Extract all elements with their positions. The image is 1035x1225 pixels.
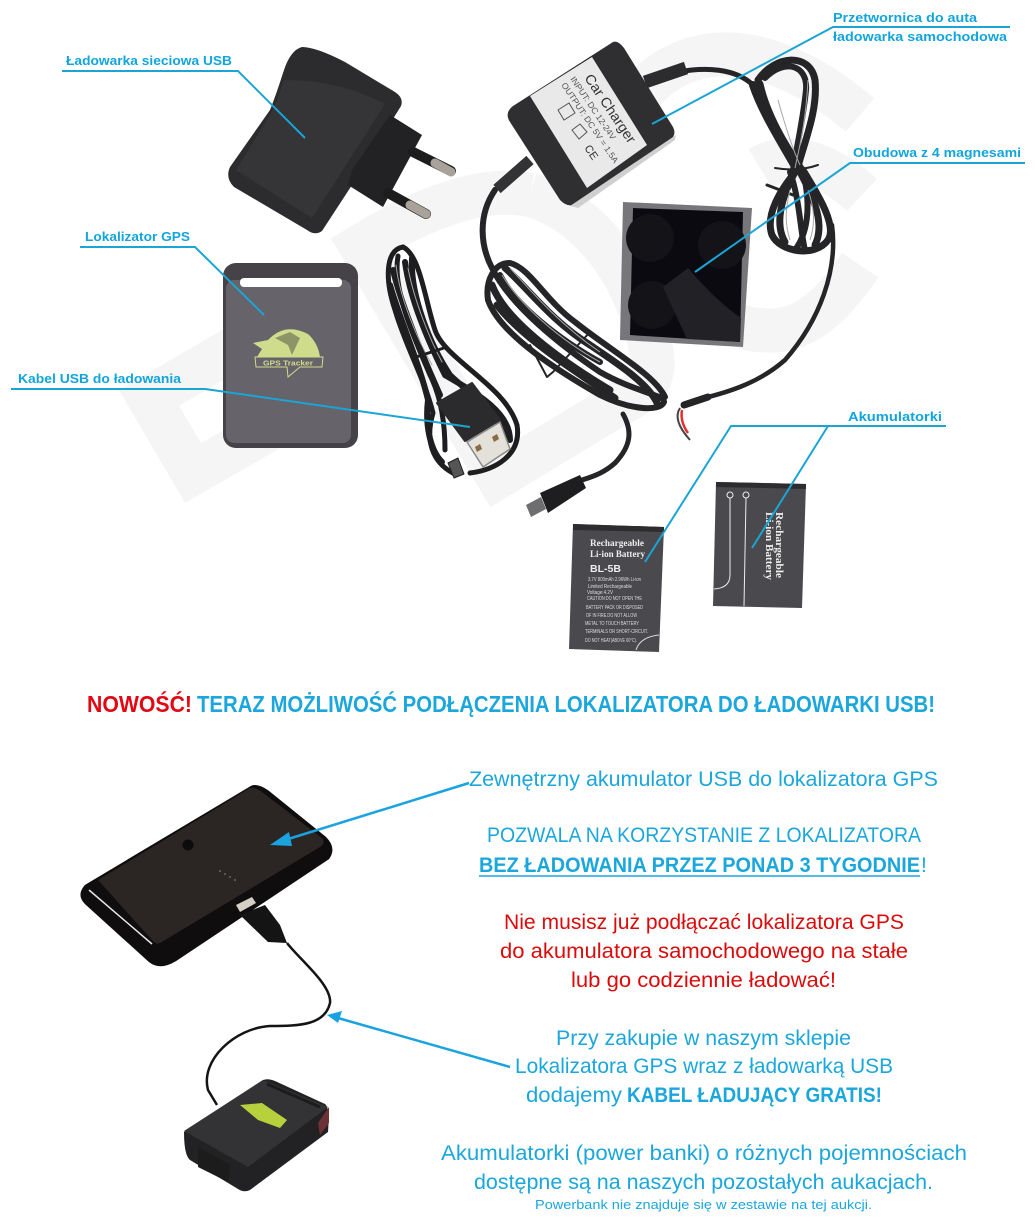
text: free charging cable: KABEL ŁADUJĄCY GRATIS! (627, 1084, 882, 1107)
product: battery BL-5B: BL-5B (590, 564, 621, 575)
callout: USB charging cable (11, 371, 470, 427)
product: power bank (82, 787, 331, 965)
callout: car charger (652, 10, 1010, 124)
callout: magnet case (695, 145, 1025, 272)
callout: GPS locator: Lokalizator GPS (85, 229, 190, 244)
product: battery BL-5B: METAL TO TOUCH BATTERY (585, 621, 640, 627)
product: battery BL-5B: DO NOT HEAT(ABOVE 60°C). (585, 638, 637, 644)
text: three weeks without charging: BEZ ŁADOWANIA PRZEZ PONAD 3 TYGODNIE (479, 854, 920, 877)
product: USB wall charger (228, 47, 451, 233)
product: battery BL-5B: 3.7V 800mAh 2.96Wh Li-ion (588, 577, 641, 583)
product: battery back (713, 482, 806, 608)
product: car charger with cable (483, 42, 833, 517)
product: magnet case (620, 202, 752, 347)
watermark: DDS logo (149, 54, 862, 477)
product: battery back: Li-ion Battery (763, 512, 774, 581)
product: battery BL-5B: TERMINALS OR SHORT-CIRCUIT. (585, 629, 648, 635)
product: car charger with cable: INPUT: DC 12-24V (568, 75, 618, 142)
product: GPS tracker (223, 263, 358, 448)
product: battery BL-5B: CAUTION:DO NOT OPEN THE (587, 596, 643, 602)
arrow: to cable (327, 1011, 510, 1067)
text: external battery: Zewnętrzny akumulator USB do lokalizatora GPS (469, 768, 938, 791)
text: power banks available: Powerbank nie znajduje się w zestawie na tej aukcji. (535, 1197, 872, 1212)
callout: batteries: Akumulatorki (848, 409, 942, 424)
callout: magnet case: Obudowa z 4 magnesami (853, 145, 1021, 160)
text: power banks available: dostępne są na naszych pozostałych aukacjach. (474, 1171, 933, 1194)
callout: USB wall charger (62, 53, 305, 138)
product: battery BL-5B: OF IN FIRE.DO NOT ALLOW (586, 613, 637, 619)
callout: batteries (645, 409, 946, 562)
text: free charging cable: Przy zakupie w naszym sklepie (556, 1027, 851, 1050)
headline: TERAZ MOŻLIWOŚĆ PODŁĄCZENIA LOKALIZATORA DO ŁADOWARKI USB! (197, 690, 935, 717)
product: car charger with cable: OUTPUT: DC 5V = 1.5A (559, 81, 621, 165)
callout: car charger: Przetwornica do auta (833, 10, 978, 25)
callout: USB charging cable: Kabel USB do ładowania (18, 371, 182, 386)
text: three weeks without charging (479, 824, 927, 877)
text: red notice (500, 911, 908, 992)
product: battery BL-5B: Limited Rechargeable (588, 584, 632, 590)
text: free charging cable: dodajemy (526, 1084, 623, 1107)
product: battery BL-5B: Voltage:4.2V (587, 590, 614, 596)
product: battery back: Rechargeable (773, 512, 784, 578)
product: battery BL-5B: BATTERY PACK OR DISPOSED (586, 605, 643, 611)
product: USB cable (388, 247, 518, 478)
text: red notice: do akumulatora samochodowego na stałe (500, 940, 908, 963)
product: car charger with cable: Car Charger (582, 71, 640, 146)
product: battery BL-5B (569, 524, 664, 652)
product: car charger with cable: CE (582, 143, 600, 162)
text: free charging cable: Lokalizatora GPS wraz z ładowarką USB (515, 1055, 893, 1078)
callout: USB wall charger: Ładowarka sieciowa USB (66, 53, 232, 68)
callout: GPS locator (80, 229, 264, 315)
callout: car charger: ładowarka samochodowa (833, 29, 1008, 44)
text: three weeks without charging: POZWALA NA KORZYSTANIE Z LOKALIZATORA (487, 824, 921, 847)
product: GPS tracker: GPS Tracker (263, 358, 313, 368)
text: three weeks without charging: ! (921, 854, 927, 877)
product: battery BL-5B: Rechargeable (590, 539, 644, 549)
cable: power bank to tracker (207, 905, 330, 1105)
text: free charging cable (515, 1027, 893, 1107)
headline: NOWOŚĆ! (87, 690, 192, 717)
product: tracker with cable (184, 1079, 329, 1191)
text: red notice: lub go codziennie ładować! (571, 969, 836, 992)
text: power banks available (441, 1142, 967, 1212)
text: power banks available: Akumulatorki (power banki) o różnych pojemnościach (441, 1142, 967, 1165)
product: battery BL-5B: Li-ion Battery (590, 550, 645, 560)
arrow: to power bank (270, 783, 469, 846)
text: red notice: Nie musisz już podłączać lokalizatora GPS (504, 911, 904, 934)
